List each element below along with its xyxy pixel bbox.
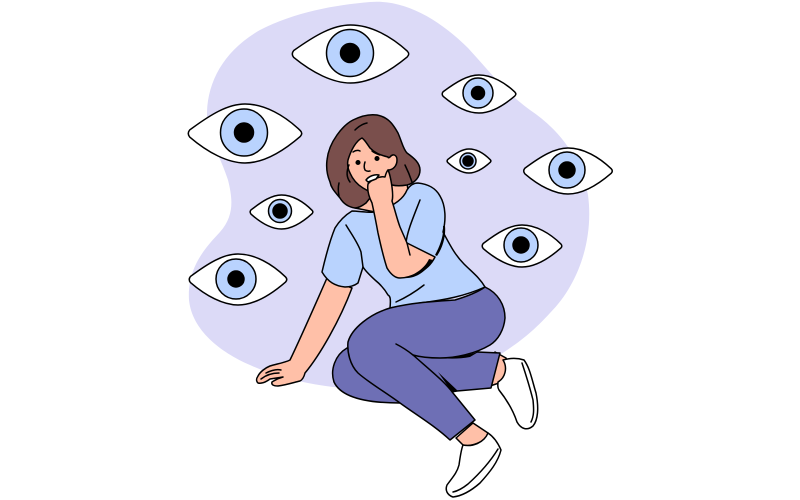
eye 2 [442,75,516,113]
far foot ankle [490,352,508,386]
pants fold [396,344,413,355]
face details [347,150,380,182]
arm crease [407,243,410,255]
eye 3 [188,104,302,163]
face [348,138,397,192]
woman [256,115,538,497]
near ankle [456,423,488,446]
hip lower leg [333,348,420,403]
neck [355,170,408,212]
far shoe [498,358,538,429]
eye 6 [250,195,313,229]
eye 8 [189,254,287,305]
hair [327,115,420,208]
hair strands [338,123,412,196]
pants shadow [438,351,480,392]
raised arm and fist [368,170,435,278]
eye 7 [482,225,562,267]
back pant leg [400,340,500,394]
shirt folds [346,200,424,302]
left arm and hand [256,278,352,386]
nails [366,175,379,182]
front pant leg [348,287,505,440]
shirt [322,183,485,308]
eye 1 [292,25,409,83]
underarm shadow [404,226,445,278]
eye 5 [524,148,612,194]
hand finger lines [261,370,281,379]
background blob [189,2,589,388]
eye 4 [447,149,491,173]
near shoe [446,433,501,497]
